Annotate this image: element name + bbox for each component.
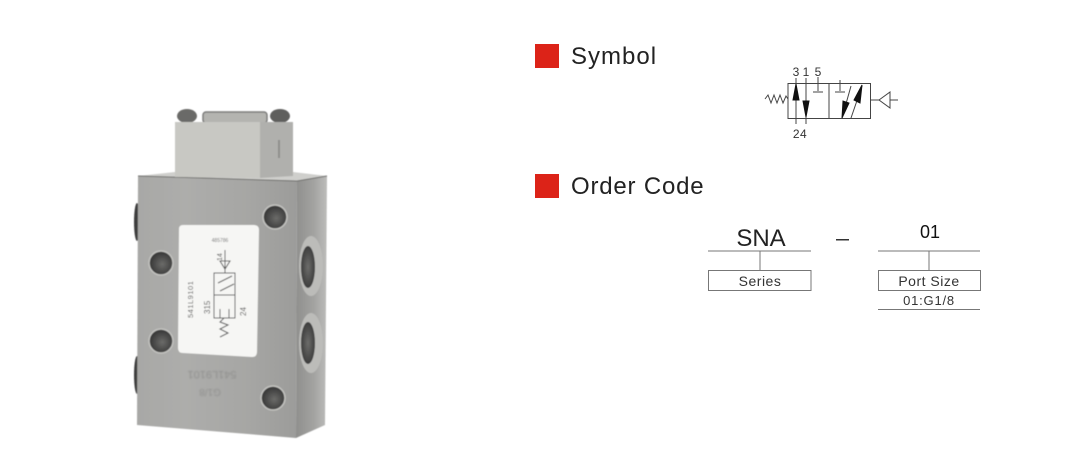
order code: port size: [878, 222, 980, 310]
label plate: 485786: [212, 238, 229, 244]
order code: port size: 01:G1/8: [903, 293, 955, 308]
symbol port numbers: 24: [793, 127, 807, 141]
heading: Order Code: Order Code: [571, 173, 704, 200]
symbol port numbers: 1: [803, 65, 810, 79]
label plate: 14: [217, 253, 224, 261]
left side fittings: [134, 203, 140, 394]
side ports: [299, 236, 323, 373]
product photo: valve: [134, 109, 327, 438]
symbol port numbers: 5: [815, 65, 822, 79]
label plate: 315: [203, 300, 212, 314]
top block: [175, 122, 293, 178]
mounting holes: [149, 205, 287, 410]
order code: dash: [836, 239, 849, 240]
order code: port size: 01: [920, 222, 940, 242]
order code: series: Series: [739, 273, 781, 289]
valve body: 541L9101: [188, 368, 236, 380]
valve body: G1/8: [199, 386, 221, 397]
symbol port numbers: [793, 65, 822, 141]
label plate: 24: [239, 307, 248, 316]
label plate: 541L9101: [186, 281, 195, 318]
order code: series: SNA: [736, 225, 786, 252]
order code: series: [708, 225, 811, 290]
pneumatic symbol diagram: [765, 77, 898, 124]
order code: port size: Port Size: [898, 273, 960, 289]
arrows: [793, 77, 862, 124]
heading: Symbol: Symbol: [571, 43, 657, 70]
top screws and cap: [177, 109, 290, 123]
pilot triangle: [871, 92, 898, 108]
label plate: [178, 225, 259, 357]
valve body: [137, 172, 327, 438]
symbol port numbers: 3: [793, 65, 800, 79]
valve box: [788, 84, 870, 118]
spring: [765, 95, 788, 103]
